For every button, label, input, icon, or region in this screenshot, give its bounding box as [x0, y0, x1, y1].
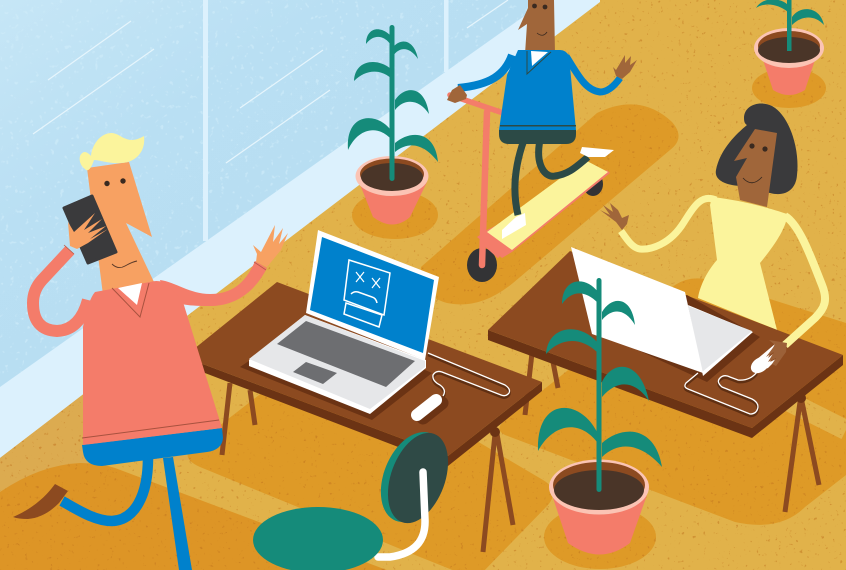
sad computer icon	[344, 260, 390, 327]
reaching hand	[600, 203, 629, 230]
chair back	[369, 423, 457, 531]
front wheel	[467, 248, 497, 282]
woman hand on mouse	[748, 216, 825, 376]
mouse	[748, 354, 772, 376]
floor region: under desk one	[188, 340, 553, 570]
plant: foreground	[538, 278, 662, 554]
phone	[64, 196, 116, 263]
shoes	[580, 147, 614, 157]
cable	[685, 374, 758, 416]
sweater	[83, 281, 222, 445]
scooter post and handlebar	[482, 112, 487, 265]
bent leg	[62, 458, 148, 521]
laptop shadow	[590, 295, 760, 382]
head	[518, 0, 555, 54]
plant: by window	[348, 25, 438, 224]
floor region: scooter track	[421, 104, 679, 304]
head	[87, 162, 154, 295]
trousers	[82, 428, 223, 466]
hand	[766, 340, 787, 366]
shoe	[13, 484, 68, 519]
mouse	[423, 403, 442, 418]
mouth	[112, 261, 137, 268]
plant: top right	[754, 0, 824, 95]
arms	[458, 55, 512, 88]
glare lines	[33, 0, 508, 163]
phone arm	[33, 250, 88, 331]
cable	[428, 353, 510, 398]
laptop lid	[571, 247, 703, 373]
collar	[118, 283, 142, 305]
plant shadows	[352, 68, 826, 569]
chair seat	[253, 507, 383, 570]
man on phone	[13, 133, 288, 570]
laptop base	[688, 305, 753, 376]
woman body	[600, 103, 798, 330]
laptop base	[249, 315, 426, 414]
floor region: left	[0, 463, 400, 570]
window glass	[0, 0, 600, 458]
neck and face	[716, 103, 798, 194]
floor region: under desk two	[499, 278, 846, 525]
reaching arm	[621, 198, 716, 249]
scooter rider	[447, 0, 637, 282]
laptop shadow	[240, 320, 432, 420]
trousers and legs	[515, 140, 524, 215]
right hand	[253, 225, 288, 267]
hands	[447, 85, 467, 103]
desk: left with crashed laptop	[184, 230, 542, 552]
phone hand	[68, 213, 108, 249]
right arm	[160, 261, 267, 306]
rear wheel	[583, 172, 603, 196]
hair	[80, 133, 144, 170]
laptop lid	[306, 230, 439, 360]
straight leg	[163, 457, 192, 570]
legs	[222, 383, 255, 455]
legs	[525, 353, 558, 415]
chair support	[378, 472, 425, 557]
right arm	[785, 216, 825, 345]
sweater	[499, 50, 576, 130]
desk: right	[488, 247, 843, 512]
chair	[253, 423, 459, 570]
scooter deck	[477, 170, 610, 258]
floor region: bottom left tint	[0, 366, 190, 492]
